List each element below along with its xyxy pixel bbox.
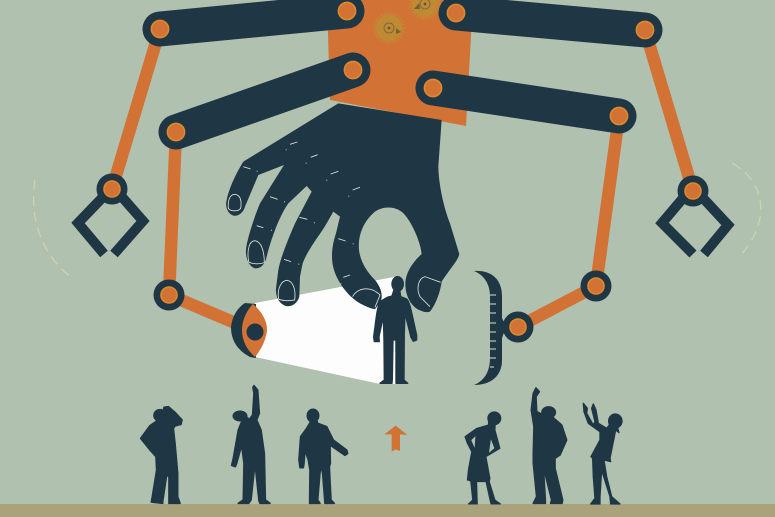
arm: upper right [456, 13, 645, 30]
person: pointing up [232, 386, 270, 503]
motion arc: left [34, 180, 72, 278]
knuckle marks [243, 142, 360, 284]
gear: lower [374, 14, 404, 42]
fingernails [228, 194, 441, 307]
right claw [662, 197, 728, 254]
orange linkage rods [112, 29, 693, 327]
person: woman raising both arms [583, 403, 622, 504]
ground strip [0, 504, 775, 517]
person: selected man in the beam [374, 276, 417, 383]
person: looking up, hand on forehead [141, 407, 182, 503]
person: arm extended [299, 409, 348, 503]
arm: upper left [160, 11, 347, 29]
arm: lower right [433, 88, 619, 116]
person: woman with hands on hips [465, 411, 501, 504]
joint bolts [96, 2, 708, 343]
up arrow [384, 426, 407, 452]
eye lamp [231, 303, 267, 358]
measuring bracket [474, 271, 506, 385]
robot body [327, 0, 473, 126]
light beam [255, 277, 396, 384]
robotic hand [226, 103, 459, 312]
left claw [78, 197, 143, 254]
motion arc: right [732, 163, 761, 256]
gear: upper [410, 0, 440, 18]
arm: lower left [176, 70, 353, 132]
person: man pointing up [531, 388, 567, 503]
